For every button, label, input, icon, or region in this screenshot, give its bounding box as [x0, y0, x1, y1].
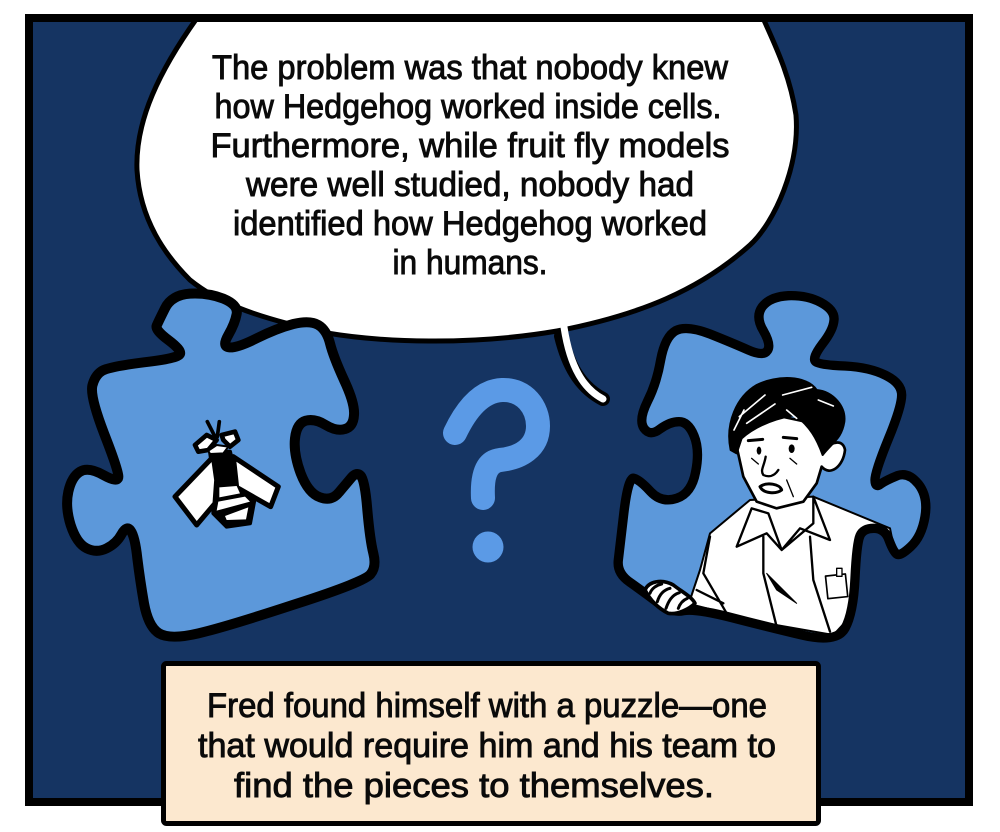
icon: question mark [455, 390, 538, 562]
left puzzle piece with fly [67, 294, 375, 637]
caption text: that would require him and his team to [198, 727, 776, 765]
eyes and brows [748, 437, 797, 464]
mouth [760, 484, 782, 493]
caption background [164, 664, 818, 824]
collar [737, 497, 830, 550]
shirt [690, 497, 895, 635]
pocket [825, 568, 848, 599]
bubble text: were well studied, nobody had [245, 166, 694, 204]
hand [645, 581, 695, 614]
bubble text [210, 49, 730, 282]
bubble tail [561, 320, 603, 399]
speech bubble [137, 18, 796, 399]
scientist figure [690, 378, 895, 635]
bubble text: how Hedgehog worked inside cells. [214, 88, 722, 126]
caption text [198, 687, 776, 805]
hair highlights [734, 387, 833, 430]
caption text: find the pieces to themselves. [234, 767, 714, 805]
caption text: Fred found himself with a puzzle—one [207, 687, 767, 725]
icon: fruit fly [175, 422, 278, 527]
hair [729, 378, 844, 455]
bubble text: in humans. [392, 244, 548, 282]
wrinkles [787, 480, 793, 497]
puzzle piece outline [618, 296, 926, 638]
nose [762, 457, 778, 476]
caption box [164, 664, 818, 824]
shirt folds and placket [697, 537, 830, 632]
bubble text: Furthermore, while fruit fly models [210, 127, 730, 165]
puzzle piece shape [67, 294, 375, 637]
right puzzle piece with scientist [618, 296, 926, 638]
puzzle piece fill [618, 296, 926, 638]
face and ear [737, 413, 845, 508]
bubble text: The problem was that nobody knew [212, 49, 728, 87]
bubble text: identified how Hedgehog worked [233, 205, 707, 243]
bubble outline [137, 18, 796, 341]
